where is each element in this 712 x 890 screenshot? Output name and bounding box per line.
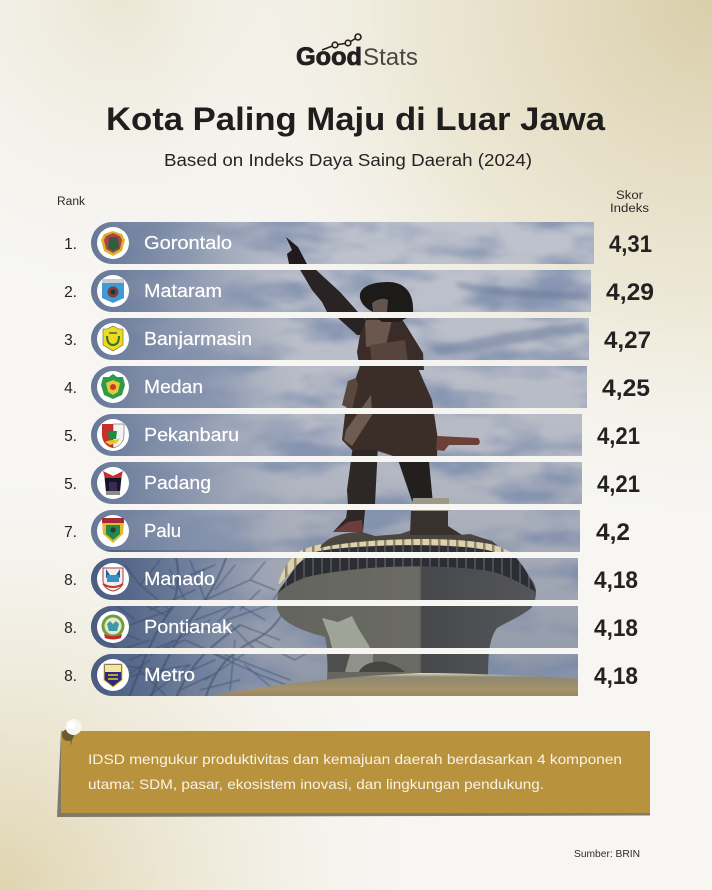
score: 4,18	[594, 663, 638, 690]
statue legs	[333, 445, 378, 532]
statue lower body	[342, 366, 438, 456]
plate rocks	[320, 529, 498, 548]
rank number: 2.	[64, 284, 77, 301]
column header: Skor Indeks: Skor	[616, 190, 643, 202]
bar chart rows	[64, 222, 654, 696]
score: 4,31	[609, 231, 652, 258]
statue arm	[299, 268, 366, 335]
crest: Mataram	[97, 275, 129, 307]
row: Manado	[64, 558, 638, 600]
note text: utama: SDM, pasar, ekosistem inovasi, dan lingkungan pendukung.	[88, 776, 544, 792]
rank number: 8.	[64, 620, 77, 637]
logo: GoodStats: Good	[296, 43, 362, 71]
city name: Medan	[144, 377, 203, 397]
rank number: 7.	[64, 524, 77, 541]
callout note	[57, 719, 650, 817]
crest: Manado	[97, 563, 129, 595]
statue torso	[357, 316, 424, 370]
score: 4,2	[596, 519, 630, 546]
statue hat and head	[360, 282, 413, 312]
subtitle: Based on Indeks Daya Saing Daerah (2024)	[164, 150, 532, 170]
lower base	[211, 673, 578, 696]
concrete patches	[322, 616, 370, 648]
city name: Manado	[144, 569, 215, 589]
saucer cream rim	[278, 535, 510, 585]
city name: Pontianak	[144, 617, 233, 637]
crest: Gorontalo	[97, 227, 129, 259]
saucer dark band	[278, 545, 536, 593]
dark cloud streaks	[455, 282, 590, 299]
score: 4,29	[606, 279, 654, 306]
row: Palu	[64, 510, 630, 552]
crest: Banjarmasin	[97, 323, 129, 355]
rank number: 5.	[64, 428, 77, 445]
photo strip: statue in the bars	[85, 215, 600, 700]
note text: IDSD mengukur produktivitas dan kemajuan daerah berdasarkan 4 komponen	[88, 751, 622, 767]
rank number: 5.	[64, 476, 77, 493]
crest: Padang	[97, 467, 129, 499]
row: Padang	[64, 462, 640, 504]
logo: GoodStats: Stats	[363, 44, 418, 71]
statue hand and pointing finger	[286, 237, 307, 264]
city name: Metro	[144, 665, 195, 685]
crest: Medan	[97, 371, 129, 403]
crest: Pekanbaru	[97, 419, 129, 451]
score: 4,18	[594, 567, 638, 594]
city name: Pekanbaru	[144, 425, 239, 445]
saucer underside	[277, 566, 536, 680]
row: Banjarmasin	[64, 318, 651, 360]
column header: Rank: Rank	[57, 196, 85, 208]
score: 4,21	[597, 423, 640, 450]
rank number: 8.	[64, 572, 77, 589]
rank number: 4.	[64, 380, 77, 397]
title: Kota Paling Maju di Luar Jawa	[106, 101, 606, 137]
column header: Skor Indeks	[610, 190, 649, 215]
score: 4,25	[602, 375, 650, 402]
row: Metro	[64, 654, 638, 696]
score: 4,27	[604, 327, 651, 354]
row: Pekanbaru	[64, 414, 640, 456]
city name: Banjarmasin	[144, 329, 252, 349]
row: Mataram	[64, 270, 654, 312]
note text	[88, 751, 622, 792]
row: Gorontalo	[64, 222, 652, 264]
row: Pontianak	[64, 606, 638, 648]
tree branches	[104, 558, 312, 700]
source: Sumber: BRIN	[574, 848, 640, 860]
rank number: 8.	[64, 668, 77, 685]
column header: Skor Indeks: Indeks	[610, 203, 649, 215]
score: 4,18	[594, 615, 638, 642]
logo: GoodStats	[296, 34, 418, 71]
row: Medan	[64, 366, 650, 408]
rank number: 1.	[64, 236, 77, 253]
city name: Palu	[144, 521, 181, 541]
crest: Pontianak	[97, 611, 129, 643]
city name: Padang	[144, 473, 211, 493]
score: 4,21	[597, 471, 640, 498]
city name: Mataram	[144, 281, 222, 301]
crest: Palu	[97, 515, 129, 547]
city name: Gorontalo	[144, 233, 232, 253]
icon: pushpin	[62, 719, 82, 746]
rank number: 3.	[64, 332, 77, 349]
crest: Metro	[97, 659, 129, 691]
